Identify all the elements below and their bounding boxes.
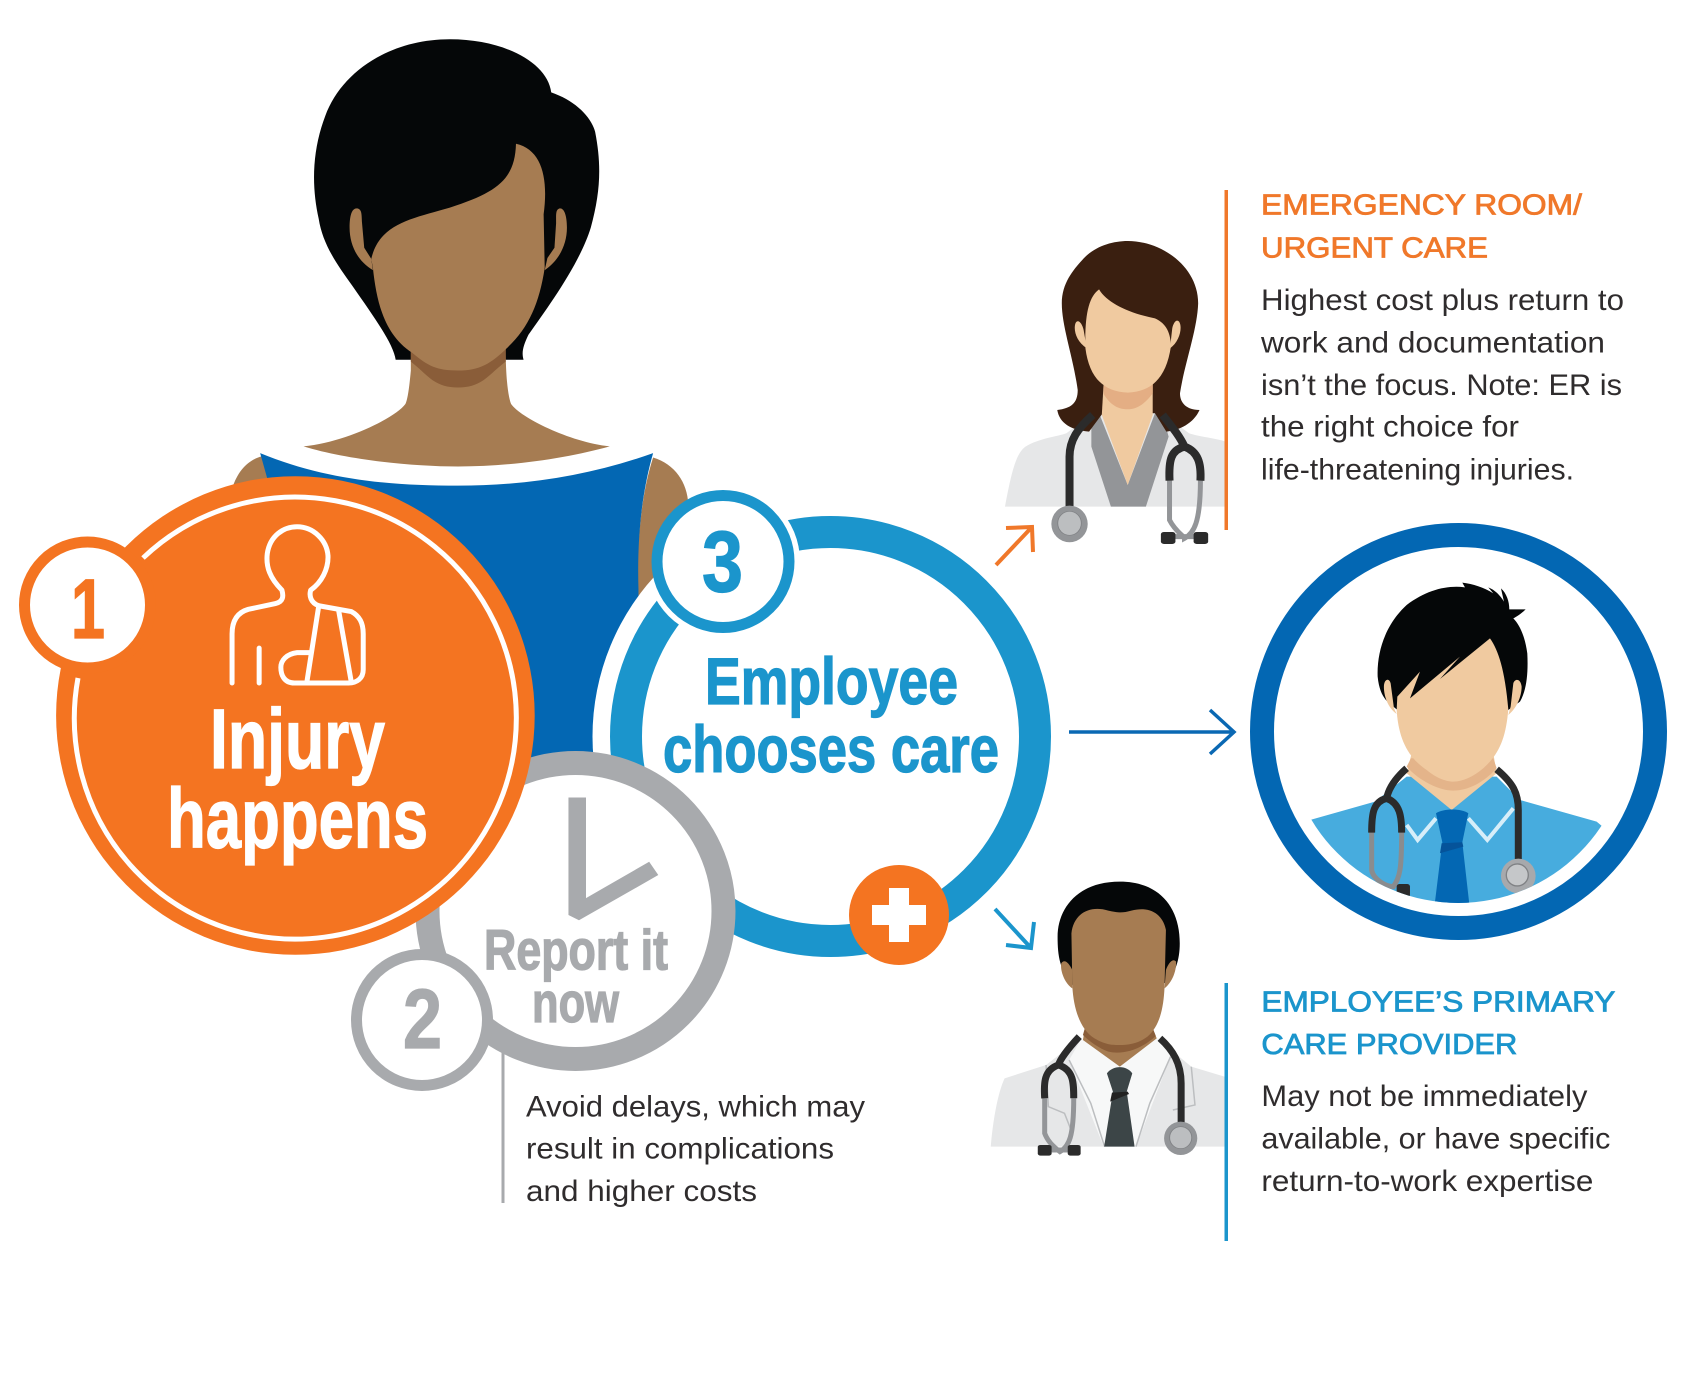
orange disc xyxy=(56,476,535,955)
heading: employee chooses care: chooses care xyxy=(663,712,999,786)
face xyxy=(1071,909,1166,1045)
heading: injury happens xyxy=(167,692,428,866)
panel: step 1 injury happens xyxy=(24,476,535,955)
stethoscope xyxy=(1051,415,1208,544)
collar lines xyxy=(1407,808,1513,840)
woman dress xyxy=(260,453,653,804)
face xyxy=(1085,289,1171,393)
neck xyxy=(1083,1027,1157,1067)
tie xyxy=(1435,810,1470,903)
heading: primary care provider: EMPLOYEE’S PRIMARY xyxy=(1261,987,1615,1019)
icon: plus badge xyxy=(849,865,949,965)
tie fold xyxy=(1110,1092,1129,1102)
badge 3: 3 xyxy=(702,514,743,610)
heading: primary care provider: CARE PROVIDER xyxy=(1261,1029,1517,1061)
illustration: female doctor xyxy=(1005,241,1225,544)
heading: emergency room xyxy=(1261,189,1583,264)
rule: primary care xyxy=(1224,983,1228,1241)
panel: step 3 employee chooses care xyxy=(592,496,1068,974)
woman neck and chest xyxy=(304,348,610,466)
body: emergency room xyxy=(1260,284,1624,486)
arrow: to occupational doctor xyxy=(1069,710,1234,754)
white halo xyxy=(592,498,1068,974)
face xyxy=(1397,638,1508,782)
badge 3 xyxy=(657,496,789,628)
blue ring xyxy=(626,532,1035,941)
coat xyxy=(1005,413,1225,507)
white inner ring xyxy=(74,497,516,939)
icon: person with arm sling xyxy=(232,527,363,683)
text: primary care provider xyxy=(1261,987,1615,1198)
panel: occupational doctor in circle xyxy=(1262,535,1655,928)
badge 2 xyxy=(356,954,488,1086)
coat xyxy=(991,1040,1224,1147)
badge 1 xyxy=(24,542,150,668)
ears xyxy=(1061,960,1176,988)
heading: primary care provider xyxy=(1261,987,1615,1061)
neck xyxy=(1102,383,1153,485)
heading: injury happens: Injury xyxy=(210,692,385,786)
body: emergency room: work and documentation xyxy=(1260,326,1605,359)
hair xyxy=(1378,583,1528,710)
illustration: male doctor blue shirt xyxy=(1311,582,1602,903)
icon: clock hands xyxy=(568,797,658,920)
woman face xyxy=(371,144,545,371)
heading: report it now xyxy=(484,918,668,1035)
neck shadow xyxy=(1083,1027,1156,1053)
neck xyxy=(1407,753,1497,810)
stethoscope xyxy=(1372,768,1536,897)
rule xyxy=(502,1050,504,1203)
body: primary care provider xyxy=(1261,1080,1610,1198)
stethoscope xyxy=(1038,1037,1197,1156)
tie xyxy=(1104,1067,1135,1147)
heading: report it now: now xyxy=(532,971,619,1035)
heading: report it now: Report it xyxy=(484,918,668,982)
arrow: to emergency room xyxy=(996,527,1033,565)
shirt xyxy=(1311,776,1602,903)
text: avoid delays: and higher costs xyxy=(526,1175,757,1208)
blouse xyxy=(1091,413,1169,507)
heading: employee chooses care xyxy=(663,644,999,786)
hair xyxy=(1058,882,1180,985)
clock ring xyxy=(428,763,724,1059)
hair xyxy=(1057,241,1200,432)
body: emergency room: isn’t the focus. Note: ER is xyxy=(1261,369,1622,402)
ears xyxy=(1075,321,1181,348)
woman neck shadow xyxy=(411,346,506,387)
illustration: male doctor white coat xyxy=(991,882,1224,1156)
text: avoid delays xyxy=(526,1091,865,1208)
text: avoid delays: result in complications xyxy=(526,1133,834,1166)
heading: injury happens: happens xyxy=(167,772,428,866)
rule: emergency room xyxy=(1224,190,1228,530)
heading: employee chooses care: Employee xyxy=(705,644,958,718)
neck shadow xyxy=(1407,758,1497,791)
heading: emergency room: URGENT CARE xyxy=(1261,232,1488,264)
body: emergency room: the right choice for xyxy=(1261,411,1519,444)
badge 2: 2 xyxy=(403,972,442,1066)
body: emergency room: life-threatening injuries. xyxy=(1261,453,1574,486)
woman arms xyxy=(232,456,688,598)
text: avoid delays: Avoid delays, which may xyxy=(526,1091,865,1124)
heading: emergency room: EMERGENCY ROOM/ xyxy=(1261,189,1583,221)
body: primary care provider: May not be immediately xyxy=(1261,1080,1587,1113)
woman hair xyxy=(314,39,599,360)
ears xyxy=(1384,680,1522,715)
tie fold xyxy=(1440,842,1463,853)
panel: step 2 report it now xyxy=(356,763,865,1208)
body: primary care provider: available, or have specific xyxy=(1261,1123,1610,1156)
text: emergency room xyxy=(1260,189,1624,486)
blue ring xyxy=(1262,535,1655,928)
arrow: to primary care provider xyxy=(995,909,1034,948)
shirt xyxy=(1069,1038,1171,1147)
illustration: woman xyxy=(232,39,688,804)
neck shadow xyxy=(1104,383,1153,409)
badge 1: 1 xyxy=(71,562,105,656)
lapels xyxy=(1046,1057,1195,1147)
body: emergency room: Highest cost plus return to xyxy=(1261,284,1624,317)
body: primary care provider: return-to-work expertise xyxy=(1261,1165,1593,1198)
woman ears xyxy=(350,208,567,270)
